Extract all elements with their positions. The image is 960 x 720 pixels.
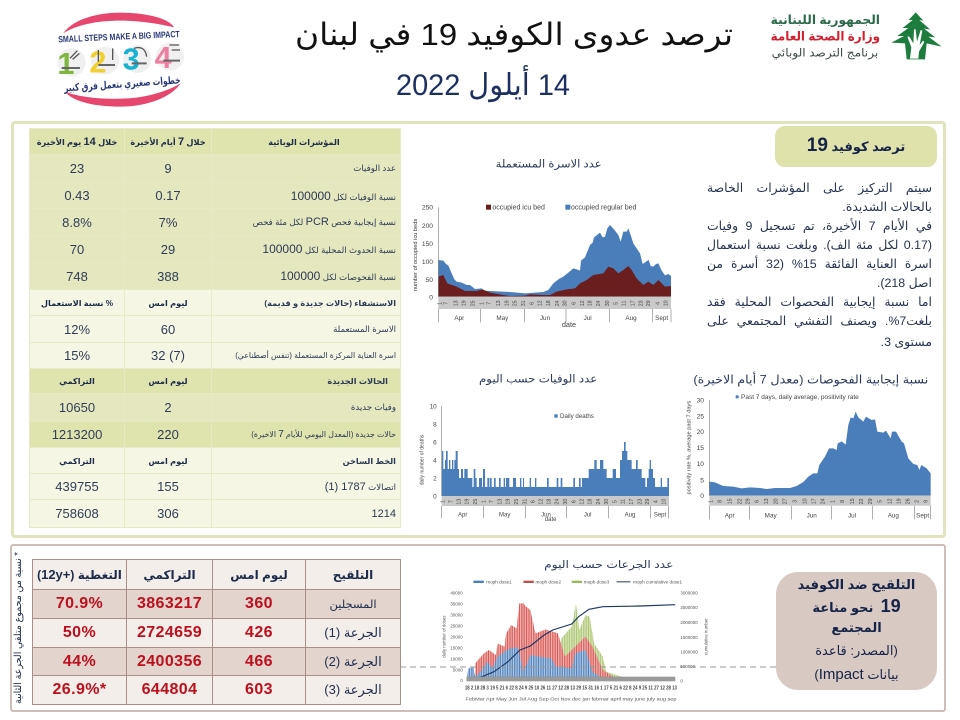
callout: vaccination towards herd immunity: المجتمع — [831, 620, 882, 635]
left axis labels: 25000 — [450, 623, 463, 628]
date ticks: 12 — [580, 499, 586, 505]
months and axis title: Sept — [654, 513, 667, 519]
date ticks: 3 — [792, 500, 798, 503]
logo: small steps make a big impact — [57, 12, 184, 107]
table: epidemiological indicators: 0.43 — [64, 188, 90, 203]
date ticks: 7 — [444, 302, 450, 305]
table: epidemiological indicators: المؤشرات الوبائية — [268, 138, 340, 146]
y axis labels: 100 — [422, 259, 433, 266]
table: epidemiological indicators: ليوم امس — [148, 456, 188, 466]
table: epidemiological indicators: 12% — [64, 322, 90, 336]
callout: vaccination towards herd immunity: بيانات Impact) — [814, 666, 899, 683]
table: epidemiological indicators: وفيات جديدة — [351, 402, 396, 412]
months and axis title: Apr — [454, 315, 464, 322]
date ticks: 7 — [489, 500, 495, 503]
left axis labels: 40000 — [450, 590, 463, 595]
legend: Past 7 days, daily average, positivity rate — [741, 394, 859, 401]
table: vaccination: الجرعة (3) — [324, 682, 382, 697]
date ticks: 13 — [497, 499, 503, 505]
date ticks: 24 — [555, 499, 561, 505]
date ticks: 19 — [504, 300, 510, 306]
months and axis title: Aug — [625, 513, 635, 519]
y axis title: positivity rate %, average past 7 days — [687, 401, 693, 495]
date ticks: 18 — [547, 499, 553, 505]
date ticks: 29 — [646, 300, 652, 306]
date ticks: 27 — [782, 498, 788, 504]
left axis labels: 5000 — [453, 668, 463, 673]
table: vaccination: 2724659 — [137, 624, 202, 641]
date ticks: 6 — [571, 500, 577, 503]
date ticks: 4 — [653, 500, 659, 503]
date ticks: 6 — [531, 500, 537, 503]
date ticks: 25 — [470, 300, 476, 306]
table: epidemiological indicators: نسبة الحدوث المحلية لكل 100000 — [262, 242, 396, 256]
date ticks: 30 — [605, 300, 611, 306]
callout: vaccination towards herd immunity — [776, 572, 937, 690]
date ticks: 29 — [868, 498, 874, 504]
y axis labels: 20 — [697, 429, 704, 436]
chart title: نسبة إيجابية الفحوصات (معدل 7 أيام الاخيرة) — [693, 371, 928, 387]
table: epidemiological indicators: الاستشفاء (حالات جديدة و قديمة) — [264, 298, 396, 308]
months and axis title: Jul — [584, 315, 592, 322]
date ticks: 9 — [923, 500, 929, 503]
title: ترصد عدوى الكوفيد 19 في لبنان — [295, 17, 733, 53]
table: vaccination: 2400356 — [137, 652, 202, 670]
logo: small steps make a big impact: 1 — [57, 47, 74, 81]
y axis labels: 10 — [430, 403, 437, 410]
date ticks: 24 — [555, 300, 561, 306]
date ticks: 6 — [755, 500, 761, 503]
y axis labels: 0 — [433, 493, 437, 500]
table: epidemiological indicators — [29, 128, 401, 528]
date ticks: 7 — [448, 500, 454, 503]
date ticks: 22 — [859, 498, 865, 504]
date ticks: 18 — [588, 499, 594, 505]
date ticks: 25 — [513, 300, 519, 306]
table: epidemiological indicators: اتصالات 1787 (1) — [325, 480, 396, 492]
date ticks: 1 — [708, 500, 714, 503]
table: vaccination: الجرعة (1) — [324, 625, 382, 640]
y axis labels: 200 — [422, 223, 433, 230]
table: epidemiological indicators: نسبة إيجابية فحص PCR لكل مئة فحص — [253, 216, 396, 228]
callout: covid-19 surveillance heading — [775, 126, 937, 167]
table: vaccination: 426 — [245, 624, 273, 641]
table: epidemiological indicators: 2 — [164, 400, 172, 415]
date ticks — [437, 300, 670, 306]
legend — [486, 205, 636, 212]
date ticks: 18 — [546, 300, 552, 306]
table: epidemiological indicators: 32 (7) — [151, 348, 185, 363]
months: Sept — [916, 512, 929, 519]
y axis labels: 15 — [697, 445, 704, 452]
date ticks: 1 — [479, 302, 485, 305]
legend: moph cumulative dose1 — [633, 579, 683, 584]
date ticks: 11 — [621, 499, 627, 504]
text block: summary: سيتم التركيز على المؤشرات الخاصة — [707, 181, 932, 195]
chart: occupied beds — [413, 158, 672, 329]
date ticks: 18 — [588, 300, 594, 306]
months and axis title: Jun — [540, 315, 551, 322]
panel: surveillance — [11, 121, 946, 538]
table: epidemiological indicators: 8.8% — [62, 214, 92, 230]
months: Jun — [807, 512, 817, 519]
date ticks: 12 — [580, 300, 586, 306]
table: vaccination: 26.9%* — [52, 681, 106, 698]
left axis labels: 30000 — [450, 612, 463, 617]
y axis labels — [422, 205, 433, 301]
legend: occupied regular bed — [571, 205, 636, 212]
date ticks: 25 — [473, 499, 479, 505]
logo: ministry of public health: برنامج الترصد الوبائي — [772, 48, 878, 61]
months and axis title: Sept — [655, 315, 668, 322]
table: epidemiological indicators: عدد الوفيات — [353, 163, 396, 173]
date ticks: 25 — [514, 499, 520, 505]
legend — [473, 579, 683, 584]
table: vaccination: 44% — [63, 652, 96, 670]
date ticks: 17 — [811, 498, 817, 504]
right axis labels: 2000000 — [680, 620, 698, 625]
date ticks: 13 — [453, 300, 459, 306]
left axis labels: 15000 — [450, 646, 463, 651]
months and axis title: May — [496, 315, 509, 322]
right axis title: cumulative number — [704, 618, 709, 655]
date ticks: 29 — [645, 499, 651, 505]
y axis labels: 150 — [422, 241, 433, 248]
table: epidemiological indicators: 10650 — [59, 400, 95, 415]
table: epidemiological indicators: 155 — [157, 479, 179, 494]
table: epidemiological indicators: 29 — [161, 242, 175, 256]
date ticks: 30 — [604, 499, 610, 505]
y axis labels: 10 — [697, 461, 704, 468]
table: vaccination: 603 — [245, 681, 273, 698]
text block: summary — [707, 181, 932, 349]
text block: summary: بالحالات الشديدة. — [842, 200, 932, 214]
date ticks: 1 — [831, 500, 837, 503]
y axis labels: 5 — [700, 477, 704, 484]
date ticks: 24 — [821, 498, 827, 504]
table: epidemiological indicators: الحالات الجديدة — [327, 377, 388, 386]
date ticks: 17 — [630, 300, 636, 306]
left axis labels — [450, 590, 463, 683]
legend: Daily deaths — [560, 413, 594, 420]
text block: summary: اما نسبة إيجابية الفحصوات المحلية فقد — [707, 295, 932, 309]
table: vaccination: التلقيح — [333, 568, 373, 582]
table: epidemiological indicators: 1213200 — [52, 427, 102, 442]
right axis labels: 0 — [680, 679, 683, 684]
table: epidemiological indicators: 15% — [64, 348, 90, 363]
table: epidemiological indicators: 23 — [70, 161, 84, 176]
months and axis title: Jul — [584, 513, 592, 519]
date ticks: 17 — [629, 499, 635, 505]
table: epidemiological indicators: نسبة الفحوصات لكل 100000 — [280, 269, 396, 283]
table: vaccination: 50% — [63, 624, 96, 641]
date ticks: 13 — [496, 300, 502, 306]
date ticks: 8 — [717, 500, 723, 503]
y axis labels — [697, 397, 704, 500]
table: epidemiological indicators: 220 — [157, 427, 179, 442]
date ticks: 23 — [637, 499, 643, 505]
date ticks: 1 — [437, 302, 443, 305]
right axis labels: 1000000 — [680, 650, 698, 655]
table: epidemiological indicators: ليوم امس — [148, 377, 188, 386]
table: epidemiological indicators: 7% — [159, 214, 177, 230]
left axis labels: 0 — [460, 678, 463, 683]
y axis title: daily number of deaths — [419, 434, 425, 485]
left axis labels: 10000 — [450, 657, 463, 662]
dashed connector — [400, 666, 776, 668]
legend: occupied icu bed — [492, 205, 545, 212]
text block: summary: في الأيام 7 الأخيرة، تم تسجيل 9 وفيات — [707, 219, 932, 233]
date ticks: 20 — [773, 498, 779, 504]
months and axis title — [454, 315, 668, 329]
months and axis title — [458, 513, 667, 523]
table: epidemiological indicators: نسبة الوفيات لكل 100000 — [291, 188, 396, 202]
date ticks: 24 — [596, 499, 602, 505]
date ticks: 1 — [481, 500, 487, 503]
chart title: عدد الجرعات حسب اليوم — [544, 559, 673, 571]
legend: moph dose3 — [584, 579, 610, 584]
table: vaccination: التراكمي — [143, 568, 196, 582]
months and axis title: Jun — [541, 513, 551, 519]
y axis labels: 0 — [429, 294, 433, 301]
table: vaccination: 644804 — [142, 681, 197, 698]
date ticks: 4 — [655, 302, 661, 305]
chart: daily deaths — [419, 374, 669, 523]
table: epidemiological indicators: حالات جديدة (المعدل اليومي للأيام 7 الاخيرة) — [251, 429, 396, 440]
date ticks: 13 — [764, 498, 770, 504]
months: Aug — [888, 512, 899, 519]
table: epidemiological indicators: اسرة العناية المركزة المستعملة (تنفس أصطناعي) — [235, 351, 396, 360]
right axis labels: 500000 — [680, 664, 696, 669]
months and axis title: Aug — [625, 315, 637, 322]
date ticks: 23 — [638, 300, 644, 306]
left axis labels: 20000 — [450, 635, 463, 640]
table: vaccination: 466 — [245, 652, 273, 670]
date ticks: 7 — [487, 302, 493, 305]
logo: small steps make a big impact: SMALL STEPS MAKE A BIG IMPACT — [58, 29, 180, 44]
right axis labels: 3000000 — [680, 590, 698, 595]
axis titles: daily number of doses — [441, 615, 447, 658]
months and axis title: date — [545, 517, 557, 523]
date ticks: 15 — [850, 498, 856, 504]
date ticks: 11 — [622, 301, 628, 306]
table: epidemiological indicators: ليوم امس — [148, 298, 188, 308]
date ticks: 5 — [877, 500, 883, 503]
table: epidemiological indicators: 70 — [70, 242, 84, 256]
table: epidemiological indicators: 758608 — [55, 506, 99, 521]
table: epidemiological indicators: % نسبة الاستعمال — [41, 298, 113, 308]
date ticks: 6 — [572, 302, 578, 305]
date heading: 14 أيلول 2022 — [396, 64, 570, 102]
callout: vaccination towards herd immunity: التلقيح ضد الكوفيد — [798, 577, 915, 592]
legend: moph dose1 — [486, 579, 512, 584]
table: vaccination: ليوم امس — [230, 568, 288, 582]
logo: ministry of public health: وزارة الصحة العامة — [771, 30, 880, 44]
date ticks: 19 — [897, 498, 903, 504]
table: epidemiological indicators: التراكمي — [59, 377, 95, 386]
date ticks: 5 — [612, 500, 618, 503]
table: epidemiological indicators: التراكمي — [59, 456, 95, 466]
months: May — [765, 512, 777, 519]
logo: small steps make a big impact: 2 — [89, 46, 106, 80]
callout: covid-19 surveillance heading: ترصد كوفيد 19 — [807, 135, 905, 156]
chart title: عدد الوفيات حسب اليوم — [479, 374, 597, 386]
table: epidemiological indicators: 306 — [157, 506, 179, 521]
table: epidemiological indicators: 9 — [164, 161, 172, 176]
y axis title: number of occupied icu beds — [413, 219, 419, 291]
y axis labels: 6 — [433, 439, 437, 446]
months and axis title: Apr — [458, 513, 467, 519]
date ticks — [441, 499, 668, 505]
date ticks: 30 — [563, 499, 569, 505]
text block: summary: اصل 218). — [877, 276, 932, 290]
text block: summary: (0.17 لكل مئة الف). وبلغت نسبة استعمال — [707, 238, 932, 252]
y axis labels: 250 — [422, 205, 433, 212]
y axis labels: 30 — [697, 397, 704, 404]
y axis labels: 50 — [426, 277, 433, 284]
table: vaccination: التغطية (12y+) — [37, 567, 122, 582]
text block: summary: بلغت7%. ويصنف التفشي المجتمعي على — [707, 314, 932, 328]
date ticks: 10 — [662, 499, 668, 505]
logo: small steps make a big impact: 3 — [123, 42, 140, 76]
table: vaccination: المسجلين — [329, 599, 377, 611]
date ticks: 26 — [906, 498, 912, 504]
date ticks: 8 — [840, 500, 846, 503]
text block: summary: مستوى 3. — [881, 335, 932, 349]
table: epidemiological indicators: الاسرة المستعملة — [333, 324, 396, 334]
callout: vaccination towards herd immunity: 19 نحو مناعة — [812, 596, 901, 616]
date ticks: 19 — [465, 499, 471, 505]
months: Apr — [725, 512, 735, 519]
logo: ministry of public health: الجمهورية اللبنانية — [771, 13, 880, 27]
footnote: share of second dose recipients: * نسبة من مجموع متلقي الجرعة الثانية — [13, 552, 24, 704]
date ticks: 15 — [727, 498, 733, 504]
table: epidemiological indicators: خلال 7 أيام الأخيرة — [130, 136, 206, 148]
table: epidemiological indicators: 748 — [66, 268, 88, 284]
date ticks: 6 — [529, 302, 535, 305]
right axis labels: 2500000 — [680, 605, 698, 610]
table: epidemiological indicators: خلال 14 يوم الأخيرة — [37, 136, 117, 148]
y axis labels: 25 — [697, 413, 704, 420]
date ticks: 12 — [538, 300, 544, 306]
y axis labels: 4 — [433, 457, 437, 464]
months and axis title: May — [499, 513, 510, 519]
date ticks: 10 — [802, 498, 808, 504]
chart title: عدد الاسرة المستعملة — [496, 158, 602, 170]
table: vaccination: 360 — [245, 595, 273, 612]
date ticks: 1 — [441, 500, 447, 503]
date ticks: 19 — [506, 499, 512, 505]
chart: positivity rate — [686, 371, 931, 520]
logo: small steps make a big impact: خطوات صغيري بتعمل فرق كبير — [63, 75, 181, 95]
table: epidemiological indicators: الخط الساخن — [343, 456, 396, 466]
date ticks: 31 — [522, 499, 528, 505]
date ticks: 22 — [737, 498, 743, 504]
months: Jul — [848, 512, 856, 519]
date ticks: 10 — [664, 300, 670, 306]
table: epidemiological indicators: 1214 — [372, 508, 396, 520]
date ticks: 24 — [596, 300, 602, 306]
panel: vaccination — [10, 544, 946, 712]
chart: daily doses — [441, 559, 709, 702]
table: epidemiological indicators: 60 — [161, 322, 175, 336]
y axis labels: 8 — [433, 421, 437, 428]
date ticks — [708, 498, 929, 504]
date ticks: 2 — [915, 500, 921, 503]
right axis labels — [680, 590, 698, 684]
table: vaccination: 3863217 — [137, 595, 202, 612]
date ticks: 5 — [613, 302, 619, 305]
date ticks: 18 2 18 28 3 19 5 21 6 22 8 24 9 25 10 26 11 27 12 28 13 29 15 31 16 1 17 5 21 6 22 8 24 9 25 11 27 12 28 13 — [465, 686, 677, 692]
date ticks: 30 — [563, 300, 569, 306]
months and axis title: date — [562, 320, 576, 329]
callout: vaccination towards herd immunity: (المصدر: قاعدة — [815, 643, 898, 658]
y axis labels: 2 — [433, 475, 437, 482]
logo: ministry of public health — [771, 12, 942, 61]
y axis labels — [430, 403, 437, 500]
legend: moph dose2 — [536, 579, 562, 584]
date ticks: 19 — [462, 300, 468, 306]
right axis labels: 1500000 — [680, 635, 698, 640]
table: epidemiological indicators: 439755 — [55, 479, 99, 494]
date ticks: 12 — [538, 499, 544, 505]
date ticks: 12 — [887, 498, 893, 504]
table: epidemiological indicators: 388 — [157, 268, 179, 284]
table: epidemiological indicators: 0.17 — [155, 188, 181, 203]
date ticks: 31 — [521, 300, 527, 306]
table: vaccination: الجرعة (2) — [324, 654, 382, 668]
left axis labels: 35000 — [450, 601, 463, 606]
table: vaccination — [32, 559, 401, 705]
months — [725, 512, 929, 519]
months: FebMar Apr May Jun Jul Aug Sep Oct Nov dec jan febmar april may june july aug sep — [466, 696, 677, 702]
logo: small steps make a big impact: 4 — [155, 41, 172, 75]
table: vaccination: 70.9% — [56, 595, 103, 612]
text block: summary: اسرة العناية الفائقة 15% (32 أسرة من — [707, 257, 932, 271]
y axis labels: 0 — [700, 493, 704, 500]
date ticks: 29 — [746, 498, 752, 504]
date ticks: 13 — [457, 499, 463, 505]
